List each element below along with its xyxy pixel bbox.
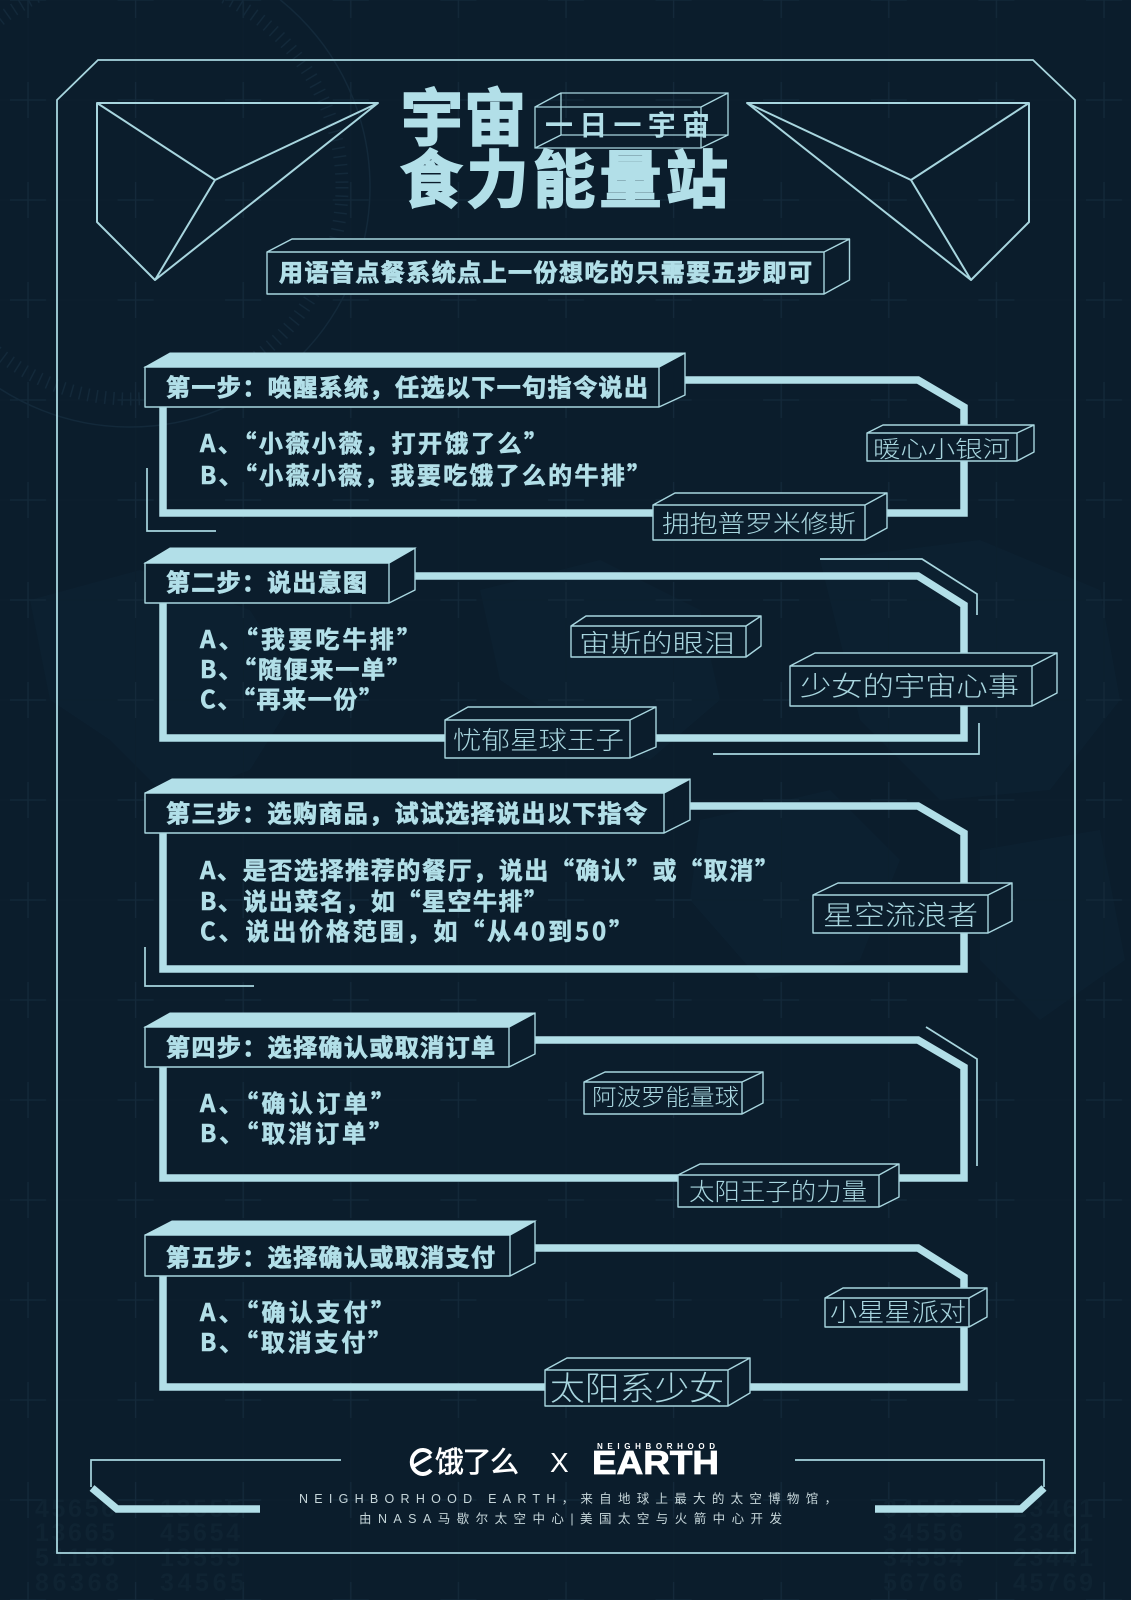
footer description: 由NASA马歇尔太空中心|美国太空与火箭中心开发 xyxy=(359,1511,782,1526)
step 1 options xyxy=(199,424,651,491)
tag: 太阳系少女: 太阳系少女 xyxy=(550,1362,724,1410)
background numbers: 51158 xyxy=(35,1544,115,1572)
step 5 options: A、“确认支付” xyxy=(199,1293,395,1328)
tag: 小星星派对 xyxy=(825,1288,987,1329)
step 4 header: 第四步：选择确认或取消订单 xyxy=(166,1028,495,1063)
tag: 阿波罗能量球: 阿波罗能量球 xyxy=(592,1078,739,1112)
background numbers: 86368 xyxy=(35,1569,119,1597)
step 2 header: 第二步：说出意图 xyxy=(166,563,367,598)
background numbers: 13665 xyxy=(35,1519,115,1547)
footer description: NEIGHBORHOOD EARTH，来自地球上最大的太空博物馆， xyxy=(299,1491,837,1506)
step 1 options: B、“小薇小薇，我要吃饿了么的牛排” xyxy=(200,456,651,491)
background numbers xyxy=(35,1495,1093,1597)
tag: 暖心小银河: 暖心小银河 xyxy=(873,430,1010,464)
background numbers: 34556 xyxy=(883,1495,963,1523)
step 2 header xyxy=(145,548,415,603)
step 1 options: A、“小薇小薇，打开饿了么” xyxy=(199,424,548,459)
background numbers: 23441 xyxy=(1013,1544,1093,1572)
footer bracket left xyxy=(91,1460,341,1509)
step 2 options: C、“再来一份” xyxy=(200,680,383,715)
step 1 header: 第一步：唤醒系统，任选以下一句指令说出 xyxy=(166,368,648,403)
step 4 options: A、“确认订单” xyxy=(199,1084,395,1119)
background numbers: 13555 xyxy=(160,1495,240,1523)
step 2 options: B、“随便来一单” xyxy=(200,650,411,685)
tag: 忧郁星球王子: 忧郁星球王子 xyxy=(453,721,624,757)
tag: 阿波罗能量球 xyxy=(584,1072,763,1114)
step 3 options: A、是否选择推荐的餐厅，说出“确认”或“取消” xyxy=(199,851,779,886)
step 5 options: B、“取消支付” xyxy=(200,1323,392,1358)
tag: 拥抱普罗米修斯 xyxy=(653,493,887,540)
step 3 options: C、说出价格范围，如“从40到50” xyxy=(200,912,633,947)
title xyxy=(400,68,728,220)
left polygon ornament xyxy=(97,103,378,280)
tag: 少女的宇宙心事: 少女的宇宙心事 xyxy=(800,665,1019,704)
title badge: 一日一宇宙 xyxy=(535,93,728,148)
tag: 宙斯的眼泪: 宙斯的眼泪 xyxy=(579,624,735,660)
step 4 panel xyxy=(145,1013,977,1207)
tag: 星空流浪者: 星空流浪者 xyxy=(823,894,978,933)
step 4 options: B、“取消订单” xyxy=(200,1114,393,1149)
right polygon ornament xyxy=(747,103,1029,280)
background numbers: 45654 xyxy=(160,1519,240,1547)
background numbers: 23461 xyxy=(1013,1495,1093,1523)
step 4 options xyxy=(199,1084,395,1149)
step 5 connector frame xyxy=(163,1248,964,1387)
step 1 corner bracket xyxy=(147,468,216,531)
background numbers: 45656 xyxy=(35,1495,115,1523)
step 2 options: A、“我要吃牛排” xyxy=(199,620,421,655)
step 2 panel xyxy=(145,548,1057,758)
step 3 connector frame xyxy=(163,806,964,969)
step 2 connector frame xyxy=(163,576,964,738)
logo: Neighborhood Earth: EARTH xyxy=(592,1444,719,1481)
title badge: 一日一宇宙: 一日一宇宙 xyxy=(545,104,710,144)
step 3 options xyxy=(199,851,779,947)
step 5 panel xyxy=(145,1221,987,1410)
step 2 options xyxy=(199,620,421,715)
step 4 accent line xyxy=(926,1027,977,1166)
background numbers: 56766 xyxy=(883,1569,963,1597)
step 3 options: B、说出菜名，如“星空牛排” xyxy=(200,882,548,917)
background numbers: 34556 xyxy=(883,1519,963,1547)
tag: 少女的宇宙心事 xyxy=(790,653,1057,706)
tag: 暖心小银河 xyxy=(867,425,1034,464)
step 2 accent lines xyxy=(713,559,979,754)
footer bracket right xyxy=(795,1460,1044,1509)
step 1 connector frame xyxy=(163,380,964,513)
step 5 options xyxy=(199,1293,395,1358)
background numbers: 45769 xyxy=(1013,1569,1093,1597)
background numbers: 34554 xyxy=(883,1544,963,1572)
step 5 header xyxy=(145,1221,535,1276)
footer description xyxy=(299,1491,837,1526)
tag: 宙斯的眼泪 xyxy=(571,616,761,660)
step 1 panel xyxy=(145,353,1034,540)
background numbers: 13555 xyxy=(160,1544,240,1572)
step 5 header: 第五步：选择确认或取消支付 xyxy=(166,1238,495,1273)
tag: 星空流浪者 xyxy=(813,883,1012,933)
logo: Neighborhood Earth: NEIGHBORHOOD xyxy=(597,1442,715,1451)
logo: 饿了么: 饿了么 xyxy=(435,1439,519,1481)
tag: 拥抱普罗米修斯: 拥抱普罗米修斯 xyxy=(662,504,856,539)
subtitle banner: 用语音点餐系统点上一份想吃的只需要五步即可 xyxy=(279,253,812,288)
tag: 太阳王子的力量: 太阳王子的力量 xyxy=(689,1172,867,1207)
step 4 connector frame xyxy=(163,1040,964,1178)
tag: 小星星派对: 小星星派对 xyxy=(830,1293,966,1329)
title: 宇宙 xyxy=(401,68,526,158)
subtitle banner xyxy=(267,239,850,294)
tag: 太阳王子的力量 xyxy=(678,1164,899,1207)
title: 食力能量站 xyxy=(400,130,728,220)
step 4 header xyxy=(145,1013,535,1067)
background numbers: 34565 xyxy=(160,1569,244,1597)
background numbers: 23461 xyxy=(1013,1519,1093,1547)
step 3 header: 第三步：选购商品，试试选择说出以下指令 xyxy=(166,794,647,829)
step 3 header xyxy=(145,779,690,833)
step 1 header xyxy=(145,353,685,407)
cross sign: X xyxy=(550,1447,569,1478)
step 3 panel xyxy=(145,779,1012,986)
tag: 忧郁星球王子 xyxy=(445,707,656,758)
step 3 corner bracket xyxy=(145,947,254,986)
